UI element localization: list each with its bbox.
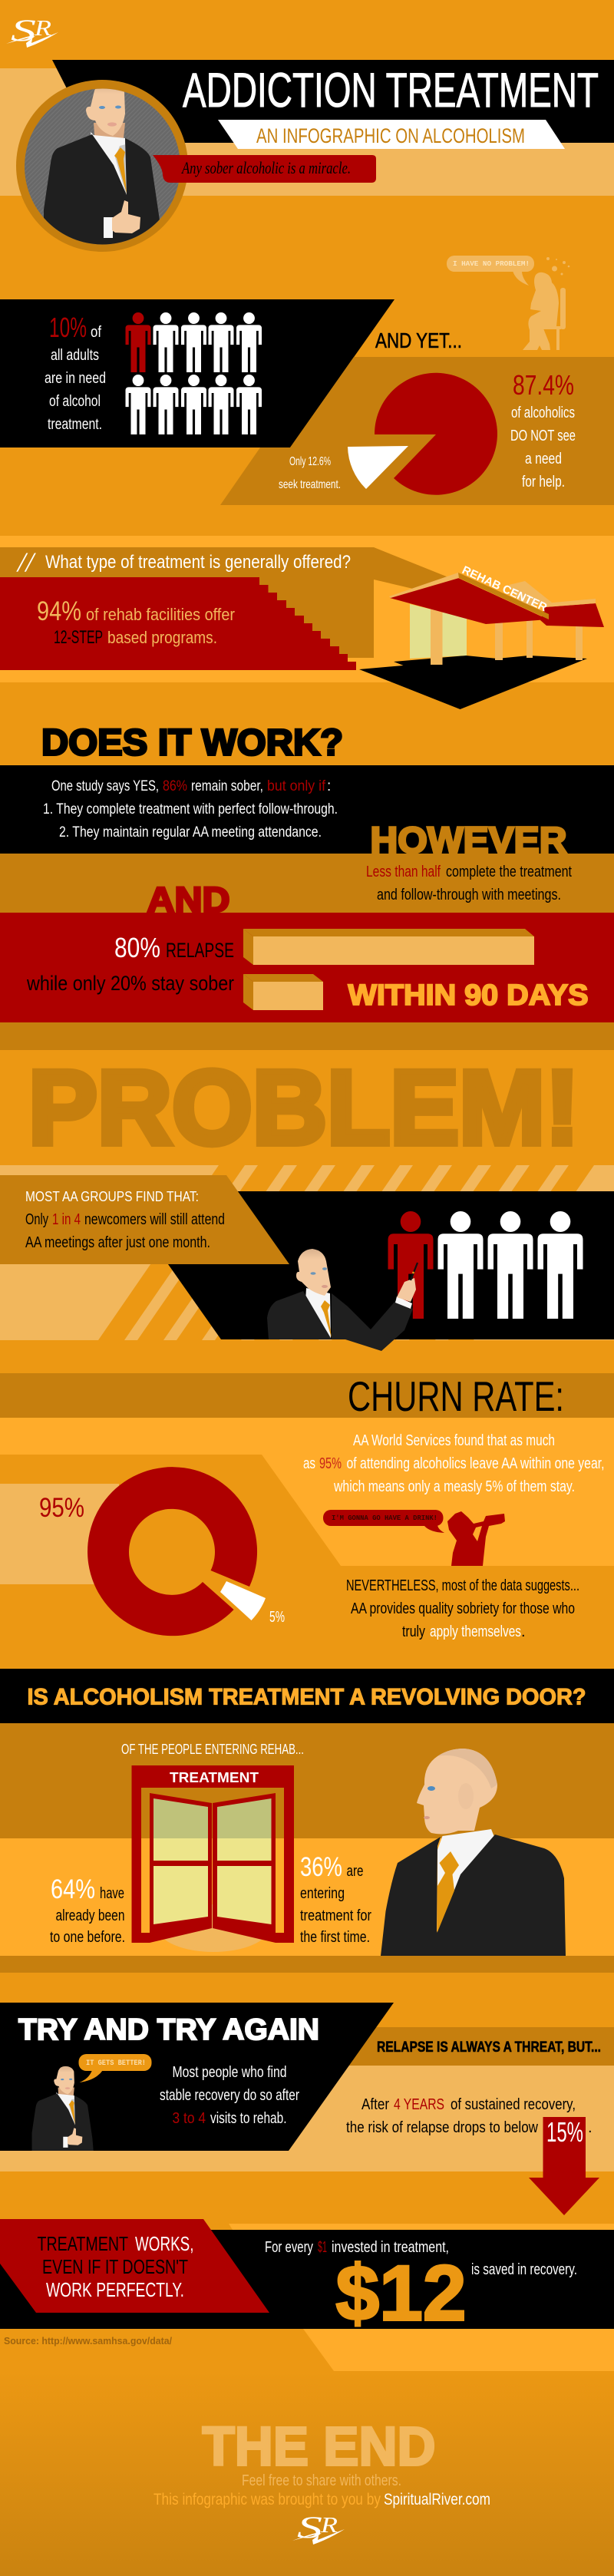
red staircase — [0, 577, 356, 670]
red callout: WORKS, — [135, 2232, 193, 2255]
pie labels: 87.4% — [513, 369, 574, 401]
recovery text: of sustained recovery, — [451, 2096, 576, 2113]
man pointing with pen — [267, 1249, 418, 1351]
newcomers text: AA meetings after just one month. — [25, 1234, 210, 1251]
panel: study result: 1. They complete treatment with perfect follow-through. — [43, 801, 338, 817]
panel: 87.4 percent pie — [220, 357, 614, 505]
bar labels: RELAPSE — [166, 939, 234, 962]
invested text: is saved in recovery. — [471, 2261, 577, 2278]
entering rehab caption: OF THE PEOPLE ENTERING REHAB... — [121, 1742, 304, 1757]
diagonal stripes — [0, 1165, 614, 1340]
panel: savings — [0, 2219, 614, 2337]
icon: rehab center building: REHAB CENTER — [460, 563, 549, 614]
subtitle banner — [218, 120, 565, 149]
panel: churn rate heading — [0, 1372, 614, 1420]
pie labels: Only 12.6% — [289, 455, 331, 468]
closing text: SpiritualRiver.com — [384, 2491, 490, 2508]
recovery text — [346, 2096, 593, 2136]
stat text — [45, 312, 106, 433]
however text: Less than half — [366, 864, 441, 880]
question heading: What type of treatment is generally offered? — [45, 552, 351, 573]
panel: study result: 86% — [163, 778, 187, 794]
however text: and follow-through with meetings. — [377, 887, 561, 903]
pie labels: a need — [525, 451, 562, 467]
panel: 10 percent need treatment — [0, 299, 394, 447]
pictogram: ten people — [126, 312, 262, 434]
newcomers text: newcomers will still attend — [84, 1211, 225, 1228]
94 percent stat: of rehab facilities offer — [86, 605, 235, 624]
icon: woman on chair with speech bubble — [447, 256, 569, 350]
donut labels: 5% — [269, 1609, 285, 1626]
source: Source: http://www.samhsa.gov/data/ — [4, 2336, 173, 2346]
64 percent stat: 64% — [51, 1874, 95, 1904]
man in profile — [381, 1749, 566, 1956]
icon: rehab center building — [359, 563, 604, 709]
94 percent stat: based programs. — [107, 628, 217, 647]
panel: study result — [0, 765, 614, 854]
panel: study result: 2. They maintain regular AA meeting attendance. — [59, 824, 322, 841]
world services text: 95% — [319, 1455, 342, 1472]
36 percent stat: entering — [300, 1885, 345, 1902]
64 percent stat — [50, 1874, 125, 1946]
36 percent stat — [300, 1852, 371, 1946]
pie chart — [348, 373, 497, 495]
arrow: down with 15 percent: 15% — [546, 2116, 583, 2148]
red callout: EVEN IF IT DOESN'T — [42, 2255, 188, 2278]
36 percent stat: the first time. — [300, 1929, 370, 1946]
man giving thumbs up — [44, 89, 160, 244]
try heading: TRY AND TRY AGAIN — [18, 2013, 319, 2046]
94 percent stat — [37, 596, 235, 648]
quote ribbon: Any sober alcoholic is a miracle. — [180, 158, 351, 177]
panel: relapse threat — [0, 2027, 614, 2215]
64 percent stat: already been — [55, 1907, 124, 1924]
bar labels: 80% — [114, 932, 160, 963]
closing text: This infographic was brought to you by — [154, 2491, 381, 2508]
the end heading: THE END — [203, 2416, 436, 2478]
however text — [366, 864, 572, 903]
logo: SR top — [6, 13, 58, 48]
and heading: AND — [147, 880, 230, 920]
panel: however — [0, 821, 614, 920]
logo: SR bottom: S — [297, 2510, 322, 2545]
logo: SR top: R — [34, 17, 51, 41]
problem heading: PROBLEM! — [28, 1049, 579, 1167]
newcomers text: MOST AA GROUPS FIND THAT: — [25, 1189, 199, 1204]
icon: revolving door: TREATMENT — [170, 1770, 259, 1785]
however text: complete the treatment — [446, 864, 572, 880]
stat text: 10% — [49, 312, 87, 343]
within 90 days: WITHIN 90 DAYS — [348, 979, 588, 1012]
speech bubble: IT GETS BETTER! — [86, 2059, 146, 2068]
stat text: of alcohol — [49, 393, 101, 410]
try text: 3 to 4 — [172, 2110, 206, 2127]
panel: study result: but only if — [267, 778, 326, 794]
icon: revolving door — [132, 1765, 294, 1952]
donut labels: 95% — [39, 1493, 84, 1523]
slashes: // — [16, 547, 36, 577]
stat text: all adults — [51, 347, 99, 364]
small man thumbs up — [32, 2066, 94, 2158]
try text: stable recovery do so after — [160, 2087, 299, 2104]
panel: revolving door heading — [0, 1669, 614, 1723]
bar labels: while only 20% stay sober — [26, 972, 234, 995]
does it work heading: DOES IT WORK? — [41, 723, 343, 763]
portrait medallion — [16, 80, 188, 257]
invested text: invested in treatment, — [332, 2239, 449, 2256]
94 percent stat: 94% — [37, 596, 81, 626]
pie labels: seek treatment. — [279, 478, 341, 491]
invested text — [265, 2239, 577, 2278]
icon: woman on chair with speech bubble: I HAVE NO PROBLEM! — [453, 260, 530, 268]
world services text: as — [303, 1455, 315, 1472]
64 percent stat: to one before. — [50, 1929, 125, 1946]
red callout: WORK PERFECTLY. — [46, 2278, 184, 2301]
try text — [160, 2064, 299, 2127]
bar: 80 percent relapse — [243, 929, 534, 965]
world services text: AA World Services found that as much — [353, 1432, 555, 1449]
quote ribbon — [153, 155, 376, 183]
64 percent stat: have — [100, 1885, 124, 1902]
panel: footer — [0, 2329, 614, 2576]
36 percent stat: 36% — [300, 1852, 342, 1882]
pictogram: four people — [388, 1211, 583, 1319]
stat text: are in need — [45, 370, 106, 387]
newcomers text: 1 in 4 — [52, 1211, 81, 1228]
red callout — [0, 2219, 269, 2313]
pie labels: of alcoholics — [511, 405, 575, 421]
panel: header — [0, 13, 614, 257]
36 percent stat: are — [347, 1863, 364, 1880]
pie labels: for help. — [522, 474, 565, 490]
closing text: Feel free to share with others. — [242, 2472, 401, 2489]
94 percent stat: 12-STEP — [54, 627, 103, 648]
nevertheless text — [346, 1577, 579, 1640]
and yet heading: AND YET... — [375, 329, 462, 352]
panel: study result: remain sober, — [191, 778, 263, 794]
panel: churn rate — [0, 1418, 614, 1640]
world services text — [303, 1432, 605, 1495]
newcomers text: Only — [25, 1211, 48, 1228]
36 percent stat: treatment for — [300, 1907, 371, 1924]
speech bubble — [78, 2054, 152, 2082]
subtitle banner: AN INFOGRAPHIC ON ALCOHOLISM — [256, 124, 525, 147]
recovery text: the risk of relapse drops to below — [346, 2119, 538, 2136]
recovery text: After — [361, 2096, 389, 2113]
donut chart — [87, 1467, 266, 1636]
bar: 20 percent sober — [243, 974, 323, 1010]
nevertheless text: truly — [402, 1623, 425, 1640]
newcomers text — [25, 1189, 225, 1251]
nevertheless text: apply themselves — [430, 1623, 521, 1640]
panel: study result: : — [327, 778, 331, 794]
try text: Most people who find — [172, 2064, 287, 2081]
icon: drinker with speech bubble: I'M GONNA GO HAVE A DRINK! — [332, 1514, 437, 1522]
twelve dollars: $12 — [336, 2249, 467, 2337]
panel: relapse within 90 days — [0, 913, 614, 1050]
recovery text: . — [588, 2119, 593, 2136]
pie labels: DO NOT see — [510, 428, 576, 444]
try text: visits to rehab. — [210, 2110, 287, 2127]
panel: study result: One study says YES, — [51, 778, 159, 794]
panel: newcomers — [0, 1165, 614, 1351]
invested text: $1 — [318, 2239, 327, 2256]
panel: try and try again — [0, 2003, 394, 2158]
however heading: HOWEVER — [370, 821, 566, 861]
logo: SR bottom: R — [320, 2514, 338, 2538]
closing text — [154, 2472, 490, 2508]
pie labels — [279, 369, 576, 491]
red callout: TREATMENT — [37, 2232, 128, 2255]
donut labels — [39, 1493, 285, 1626]
logo: SR top: S — [11, 13, 36, 48]
stat text: treatment. — [48, 416, 102, 433]
panel: type of treatment — [0, 536, 614, 709]
recovery text: 4 YEARS — [394, 2096, 444, 2113]
invested text: For every — [265, 2239, 313, 2256]
stat text: of — [91, 324, 101, 341]
logo: SR bottom — [292, 2510, 345, 2545]
panel: revolving door — [0, 1723, 614, 1973]
arrow: down with 15 percent — [529, 2116, 599, 2215]
bar labels — [26, 932, 234, 995]
icon: drinker with speech bubble — [323, 1510, 505, 1566]
panel: revolving door heading: IS ALCOHOLISM TREATMENT A REVOLVING DOOR? — [28, 1684, 586, 1710]
nevertheless text: . — [521, 1623, 526, 1640]
